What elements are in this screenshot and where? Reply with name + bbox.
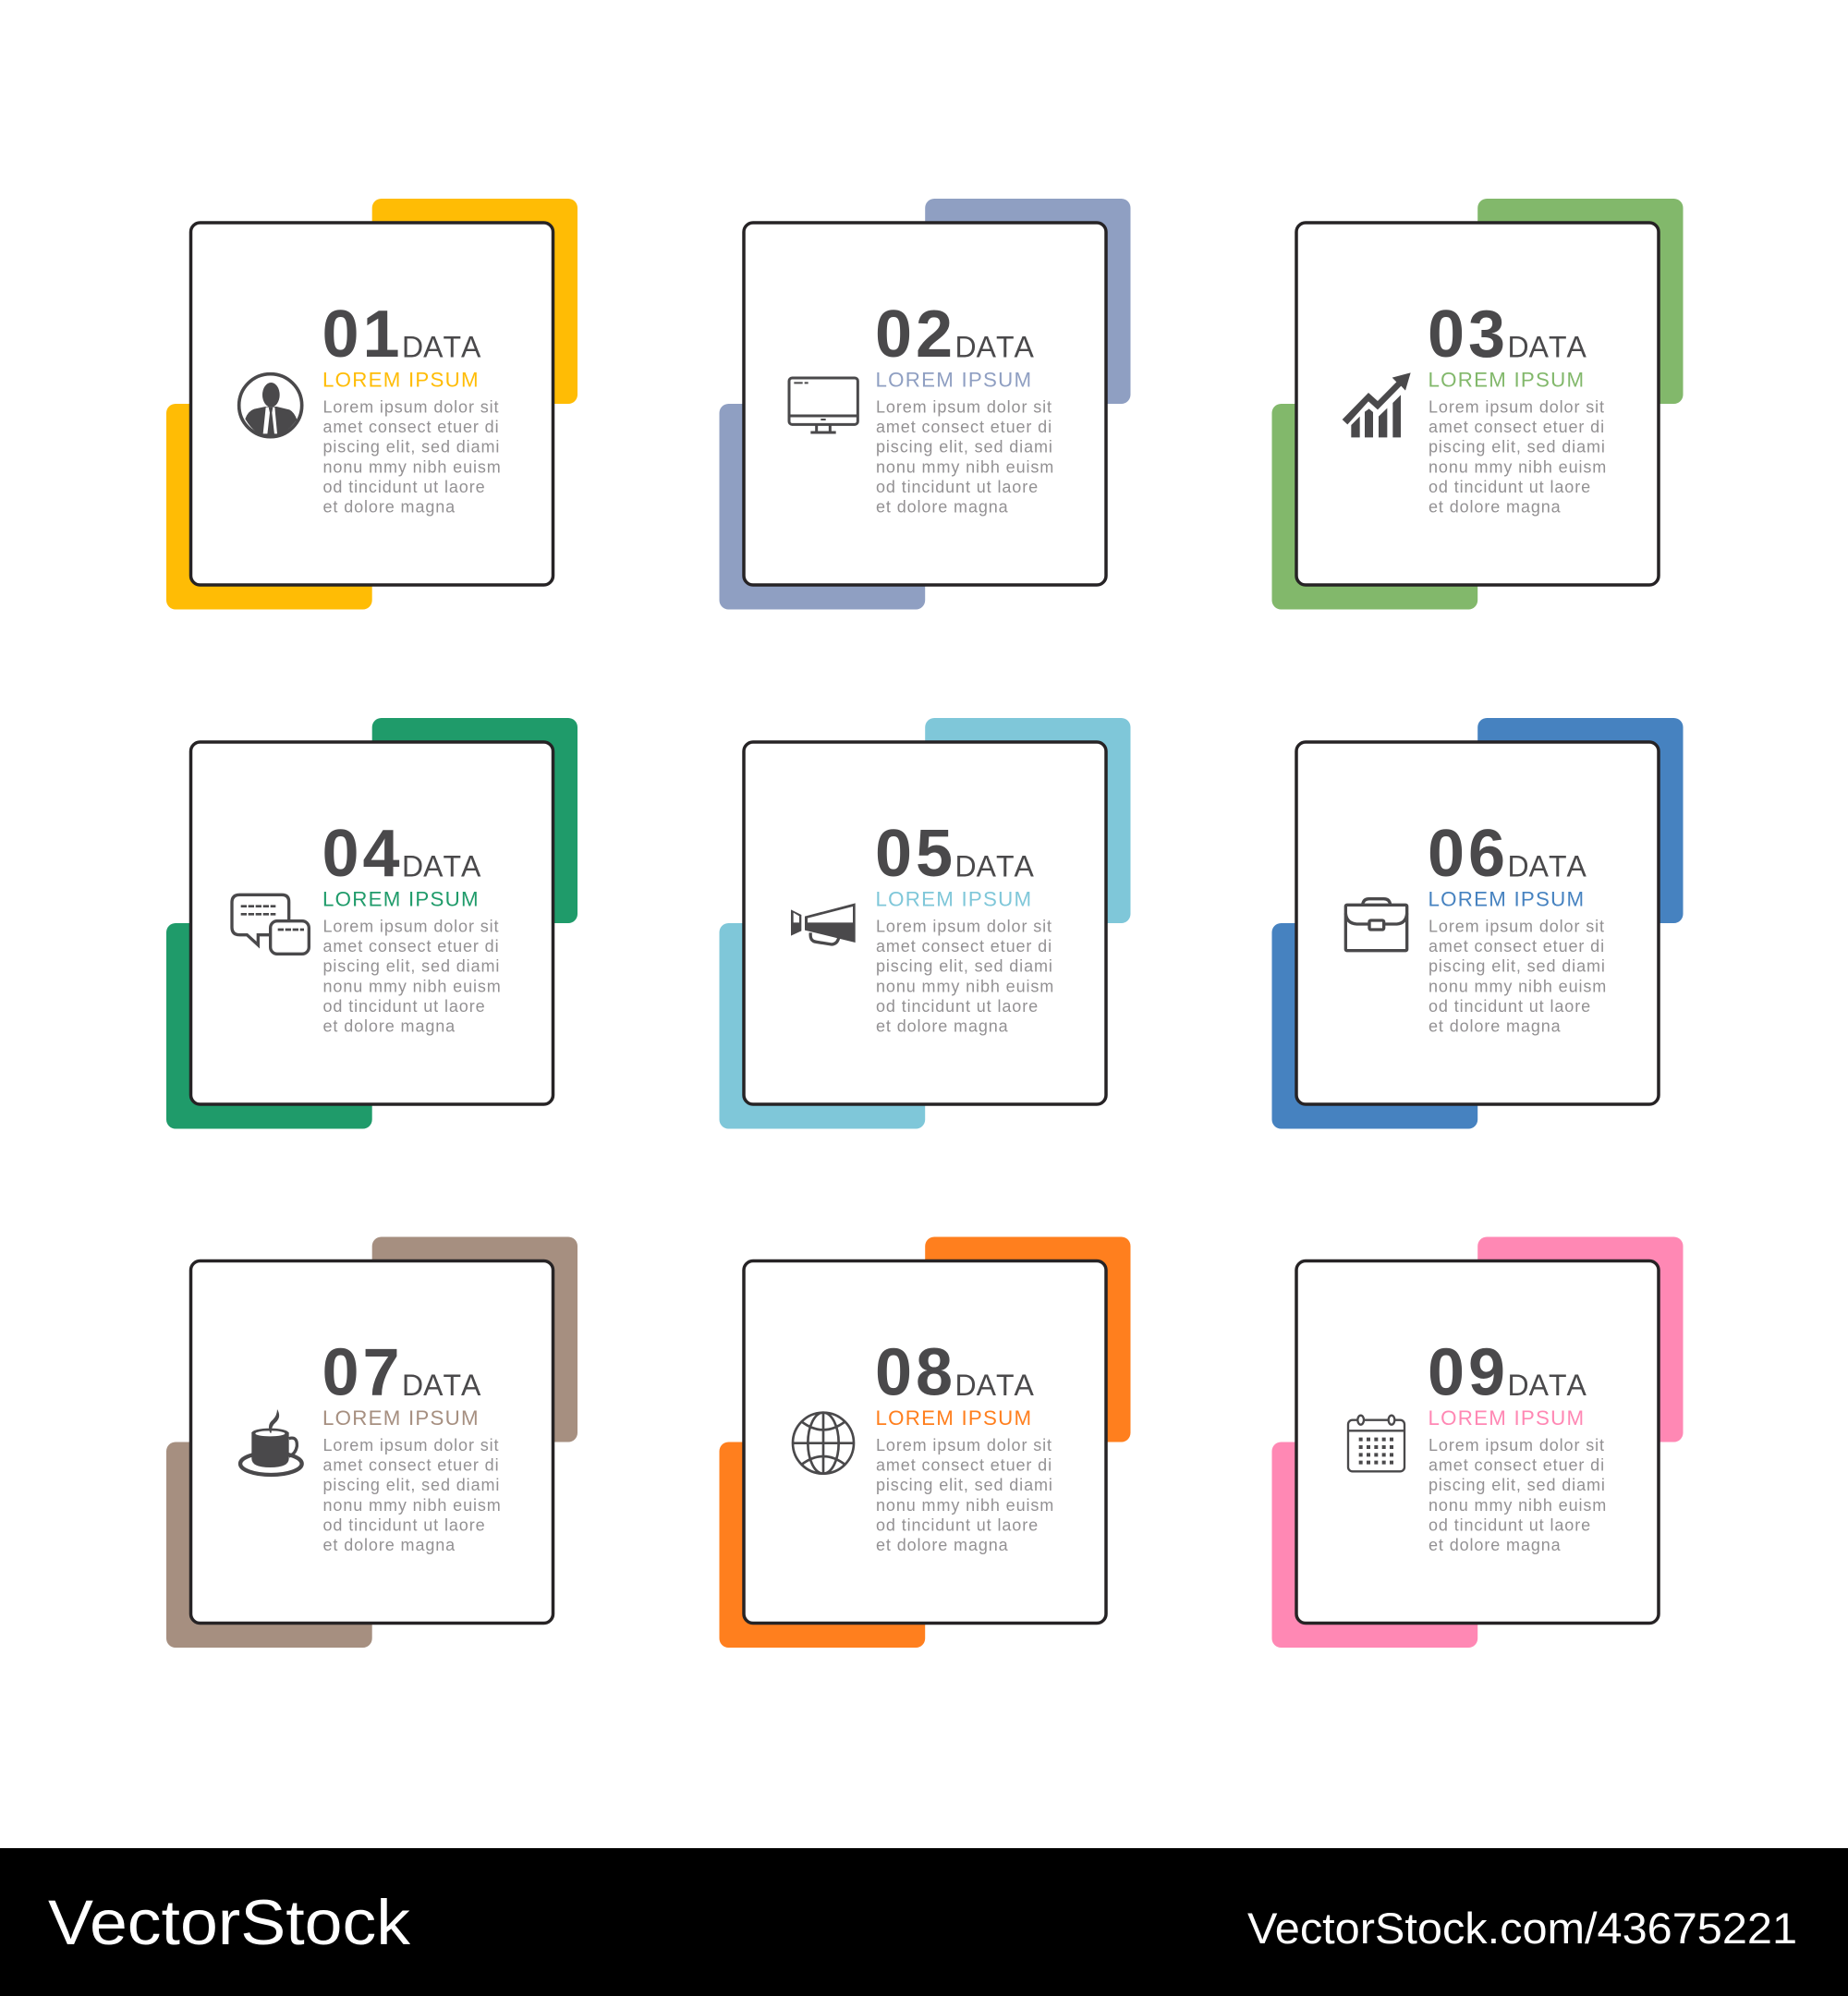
- body text: amet consect etuer di: [323, 1456, 499, 1475]
- number: 02: [875, 298, 956, 371]
- label: DATA: [1508, 1369, 1587, 1402]
- body text: Lorem ipsum dolor sit: [323, 397, 499, 416]
- body text: od tincidunt ut laore: [323, 1515, 486, 1534]
- label: DATA: [1508, 850, 1587, 883]
- body text: et dolore magna: [1429, 497, 1562, 516]
- number: 05: [875, 817, 956, 891]
- number: 09: [1428, 1336, 1509, 1410]
- panel: card 01: [166, 199, 578, 610]
- label: DATA: [402, 1369, 481, 1402]
- body text: nonu mmy nibh euism: [323, 1496, 502, 1515]
- icon: businessman: [239, 374, 302, 437]
- subtitle: LOREM IPSUM: [322, 887, 480, 910]
- icon: globe: [793, 1413, 854, 1474]
- body text: nonu mmy nibh euism: [323, 977, 502, 995]
- body text: nonu mmy nibh euism: [1429, 457, 1607, 476]
- icon: calendar: [1348, 1416, 1404, 1471]
- body text: nonu mmy nibh euism: [1429, 1496, 1607, 1515]
- body text: Lorem ipsum dolor sit: [1429, 397, 1605, 416]
- panel: card 08: [719, 1236, 1131, 1648]
- subtitle: LOREM IPSUM: [876, 368, 1032, 391]
- body text: nonu mmy nibh euism: [876, 977, 1054, 995]
- body text: od tincidunt ut laore: [1429, 1515, 1591, 1534]
- body text: piscing elit, sed diami: [876, 438, 1053, 456]
- body text: piscing elit, sed diami: [323, 957, 500, 976]
- subtitle: LOREM IPSUM: [1429, 368, 1585, 391]
- icon: briefcase: [1345, 899, 1407, 951]
- panel: card 02: [719, 199, 1131, 610]
- body text: nonu mmy nibh euism: [876, 1496, 1054, 1515]
- body text: amet consect etuer di: [323, 418, 499, 436]
- body text: od tincidunt ut laore: [876, 997, 1039, 1016]
- body text: et dolore magna: [323, 1016, 456, 1035]
- body text: amet consect etuer di: [323, 937, 499, 955]
- body text: et dolore magna: [323, 497, 456, 516]
- body text: nonu mmy nibh euism: [876, 457, 1054, 476]
- body text: Lorem ipsum dolor sit: [1429, 917, 1605, 935]
- body text: piscing elit, sed diami: [323, 438, 500, 456]
- label: DATA: [955, 1369, 1035, 1402]
- number: 01: [322, 298, 404, 371]
- label: DATA: [402, 850, 481, 883]
- body text: amet consect etuer di: [876, 937, 1052, 955]
- body text: et dolore magna: [1429, 1536, 1562, 1554]
- body text: od tincidunt ut laore: [323, 478, 486, 496]
- body text: nonu mmy nibh euism: [323, 457, 502, 476]
- label: DATA: [955, 331, 1035, 364]
- panel: card 05: [719, 718, 1131, 1129]
- label: DATA: [402, 331, 481, 364]
- body text: od tincidunt ut laore: [323, 997, 486, 1016]
- number: 08: [875, 1336, 956, 1410]
- body text: et dolore magna: [876, 1536, 1009, 1554]
- subtitle: LOREM IPSUM: [876, 1406, 1032, 1430]
- body text: piscing elit, sed diami: [323, 1476, 500, 1494]
- body text: piscing elit, sed diami: [876, 1476, 1053, 1494]
- subtitle: LOREM IPSUM: [1429, 1406, 1585, 1430]
- body text: amet consect etuer di: [1429, 937, 1605, 955]
- panel: card 07: [166, 1236, 578, 1648]
- body text: Lorem ipsum dolor sit: [1429, 1436, 1605, 1454]
- body text: Lorem ipsum dolor sit: [876, 397, 1052, 416]
- body text: od tincidunt ut laore: [1429, 997, 1591, 1016]
- body text: amet consect etuer di: [876, 418, 1052, 436]
- label: DATA: [955, 850, 1035, 883]
- footer logo: VectorStock: [48, 1887, 411, 1958]
- body text: piscing elit, sed diami: [876, 957, 1053, 976]
- body text: et dolore magna: [323, 1536, 456, 1554]
- body text: Lorem ipsum dolor sit: [323, 1436, 499, 1454]
- body text: Lorem ipsum dolor sit: [876, 917, 1052, 935]
- subtitle: LOREM IPSUM: [1429, 887, 1585, 910]
- body text: piscing elit, sed diami: [1429, 1476, 1606, 1494]
- panel: card 03: [1271, 199, 1684, 610]
- body text: Lorem ipsum dolor sit: [323, 917, 499, 935]
- subtitle: LOREM IPSUM: [322, 1406, 480, 1430]
- subtitle: LOREM IPSUM: [876, 887, 1032, 910]
- body text: et dolore magna: [876, 1016, 1009, 1035]
- number: 03: [1428, 298, 1509, 371]
- body text: od tincidunt ut laore: [876, 1515, 1039, 1534]
- body text: Lorem ipsum dolor sit: [876, 1436, 1052, 1454]
- panel: card 06: [1271, 718, 1684, 1129]
- body text: nonu mmy nibh euism: [1429, 977, 1607, 995]
- body text: piscing elit, sed diami: [1429, 438, 1606, 456]
- icon: megaphone: [791, 903, 856, 944]
- body text: od tincidunt ut laore: [876, 478, 1039, 496]
- body text: od tincidunt ut laore: [1429, 478, 1591, 496]
- icon: monitor: [789, 378, 857, 432]
- panel: card 09: [1271, 1236, 1684, 1648]
- footer bar: [0, 1848, 1848, 1996]
- subtitle: LOREM IPSUM: [322, 368, 480, 391]
- label: DATA: [1508, 331, 1587, 364]
- body text: amet consect etuer di: [1429, 418, 1605, 436]
- number: 07: [322, 1336, 404, 1410]
- number: 06: [1428, 817, 1509, 891]
- number: 04: [322, 817, 404, 891]
- icon: growth chart: [1343, 372, 1411, 437]
- body text: piscing elit, sed diami: [1429, 957, 1606, 976]
- body text: et dolore magna: [876, 497, 1009, 516]
- body text: amet consect etuer di: [1429, 1456, 1605, 1475]
- body text: et dolore magna: [1429, 1016, 1562, 1035]
- panel: card 04: [166, 718, 578, 1129]
- footer url: VectorStock.com/43675221: [1247, 1904, 1797, 1953]
- body text: amet consect etuer di: [876, 1456, 1052, 1475]
- icon: coffee cup: [240, 1409, 302, 1475]
- icon: chat bubbles: [232, 895, 309, 954]
